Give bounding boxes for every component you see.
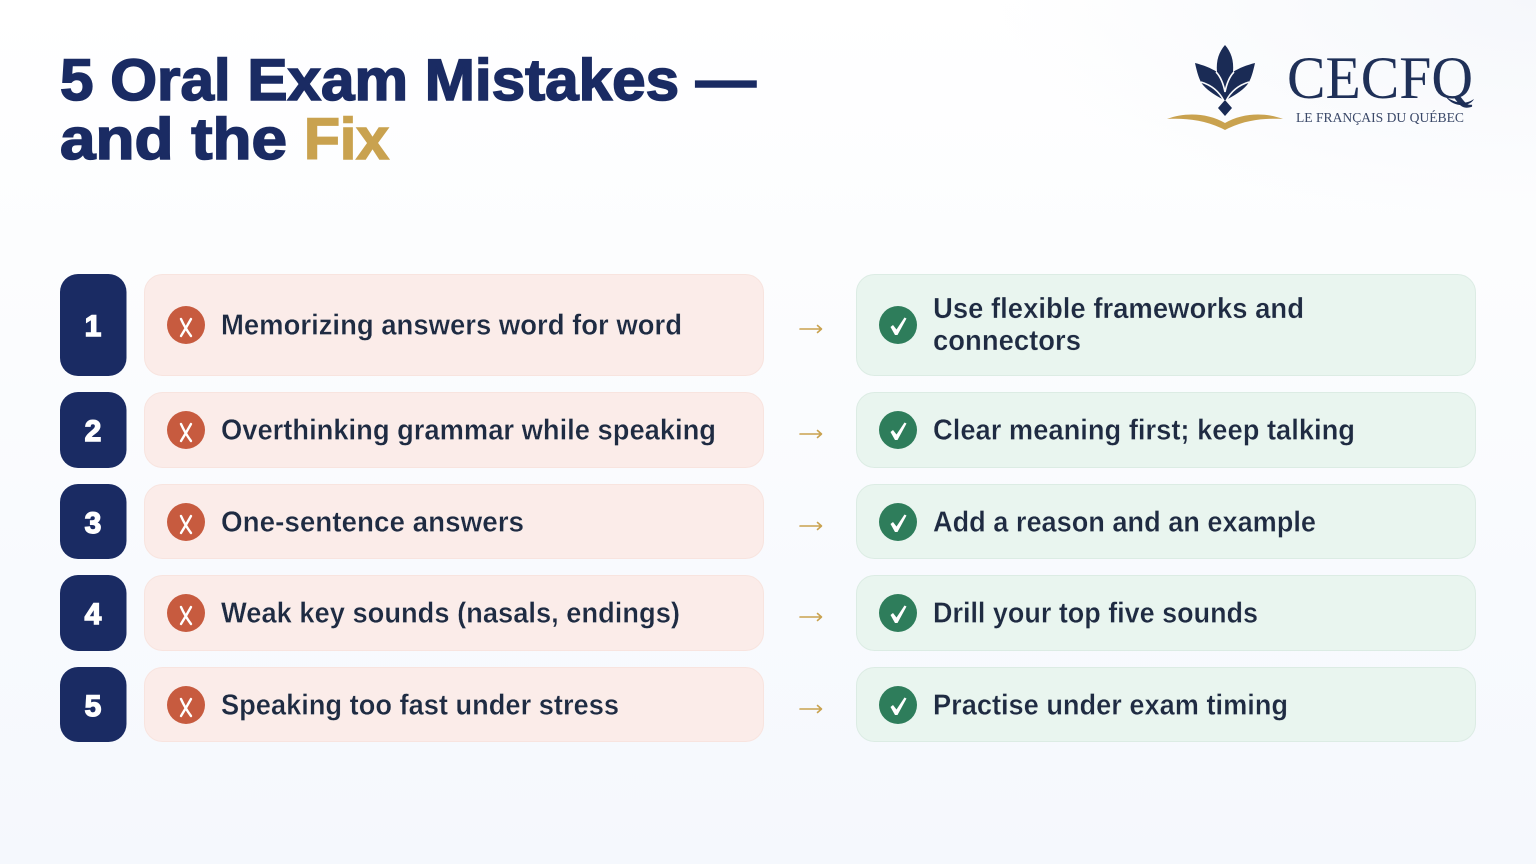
number badge 2: 2	[85, 415, 101, 448]
arrow	[800, 522, 822, 530]
row 2	[60, 392, 1476, 468]
icon: check	[879, 411, 917, 449]
mistake text: Speaking too fast under stress	[221, 690, 619, 722]
number badge 3: 3	[85, 507, 101, 540]
number badge 1	[60, 274, 126, 376]
mistake text: One-sentence answers	[221, 506, 524, 538]
icon: cross	[167, 411, 205, 449]
fix text: Drill your top five sounds	[933, 598, 1258, 630]
number badge 3	[60, 484, 126, 559]
mistake text: Memorizing answers word for word	[221, 310, 682, 342]
mistake card 5	[144, 668, 764, 742]
fix text: Use flexible frameworks and	[933, 293, 1304, 325]
icon: cross	[167, 594, 205, 632]
logo: CECFQ	[1167, 45, 1474, 130]
mistake text: Weak key sounds (nasals, endings)	[221, 598, 680, 630]
title	[60, 48, 756, 172]
mistake card 4	[144, 576, 764, 650]
arrow	[800, 706, 822, 712]
fix text	[933, 293, 1304, 357]
fix card 5	[856, 668, 1476, 742]
fix text: Practise under exam timing	[933, 690, 1288, 722]
fix card 2	[856, 392, 1476, 468]
fix card 4	[856, 576, 1476, 650]
arrow	[800, 614, 822, 620]
icon: check	[879, 594, 917, 632]
title: and the	[60, 107, 287, 172]
fix card 3	[856, 484, 1476, 558]
title: Fix	[304, 107, 389, 172]
fix text: Clear meaning first; keep talking	[933, 414, 1355, 446]
number badge 5: 5	[85, 690, 101, 723]
row 5	[60, 667, 1476, 742]
fix text: connectors	[933, 325, 1081, 357]
icon: check	[879, 306, 917, 344]
mistake card 3	[144, 484, 764, 558]
arrow	[800, 326, 822, 332]
row 4	[60, 575, 1476, 651]
mistake card 2	[144, 392, 764, 468]
arrow	[800, 430, 822, 438]
row 1	[60, 274, 1476, 376]
mistake text: Overthinking grammar while speaking	[221, 414, 716, 446]
fix text: Add a reason and an example	[933, 506, 1316, 538]
icon: cross	[167, 686, 205, 724]
title: 5 Oral Exam Mistakes —	[60, 48, 756, 113]
icon: check	[879, 503, 917, 541]
number badge 1: 1	[85, 310, 101, 343]
number badge 5	[60, 667, 126, 742]
logo wordmark: CECFQ	[1287, 45, 1473, 111]
logo tagline: LE FRANÇAIS DU QUÉBEC	[1296, 109, 1464, 126]
row 3	[60, 484, 1476, 559]
fix card 1	[856, 274, 1476, 376]
mistake card 1	[144, 274, 764, 376]
number badge 4	[60, 575, 126, 651]
icon: check	[879, 686, 917, 724]
number badge 4: 4	[85, 598, 102, 631]
number badge 2	[60, 392, 126, 468]
icon: fleur and open book	[1167, 45, 1283, 130]
icon: cross	[167, 306, 205, 344]
icon: cross	[167, 503, 205, 541]
